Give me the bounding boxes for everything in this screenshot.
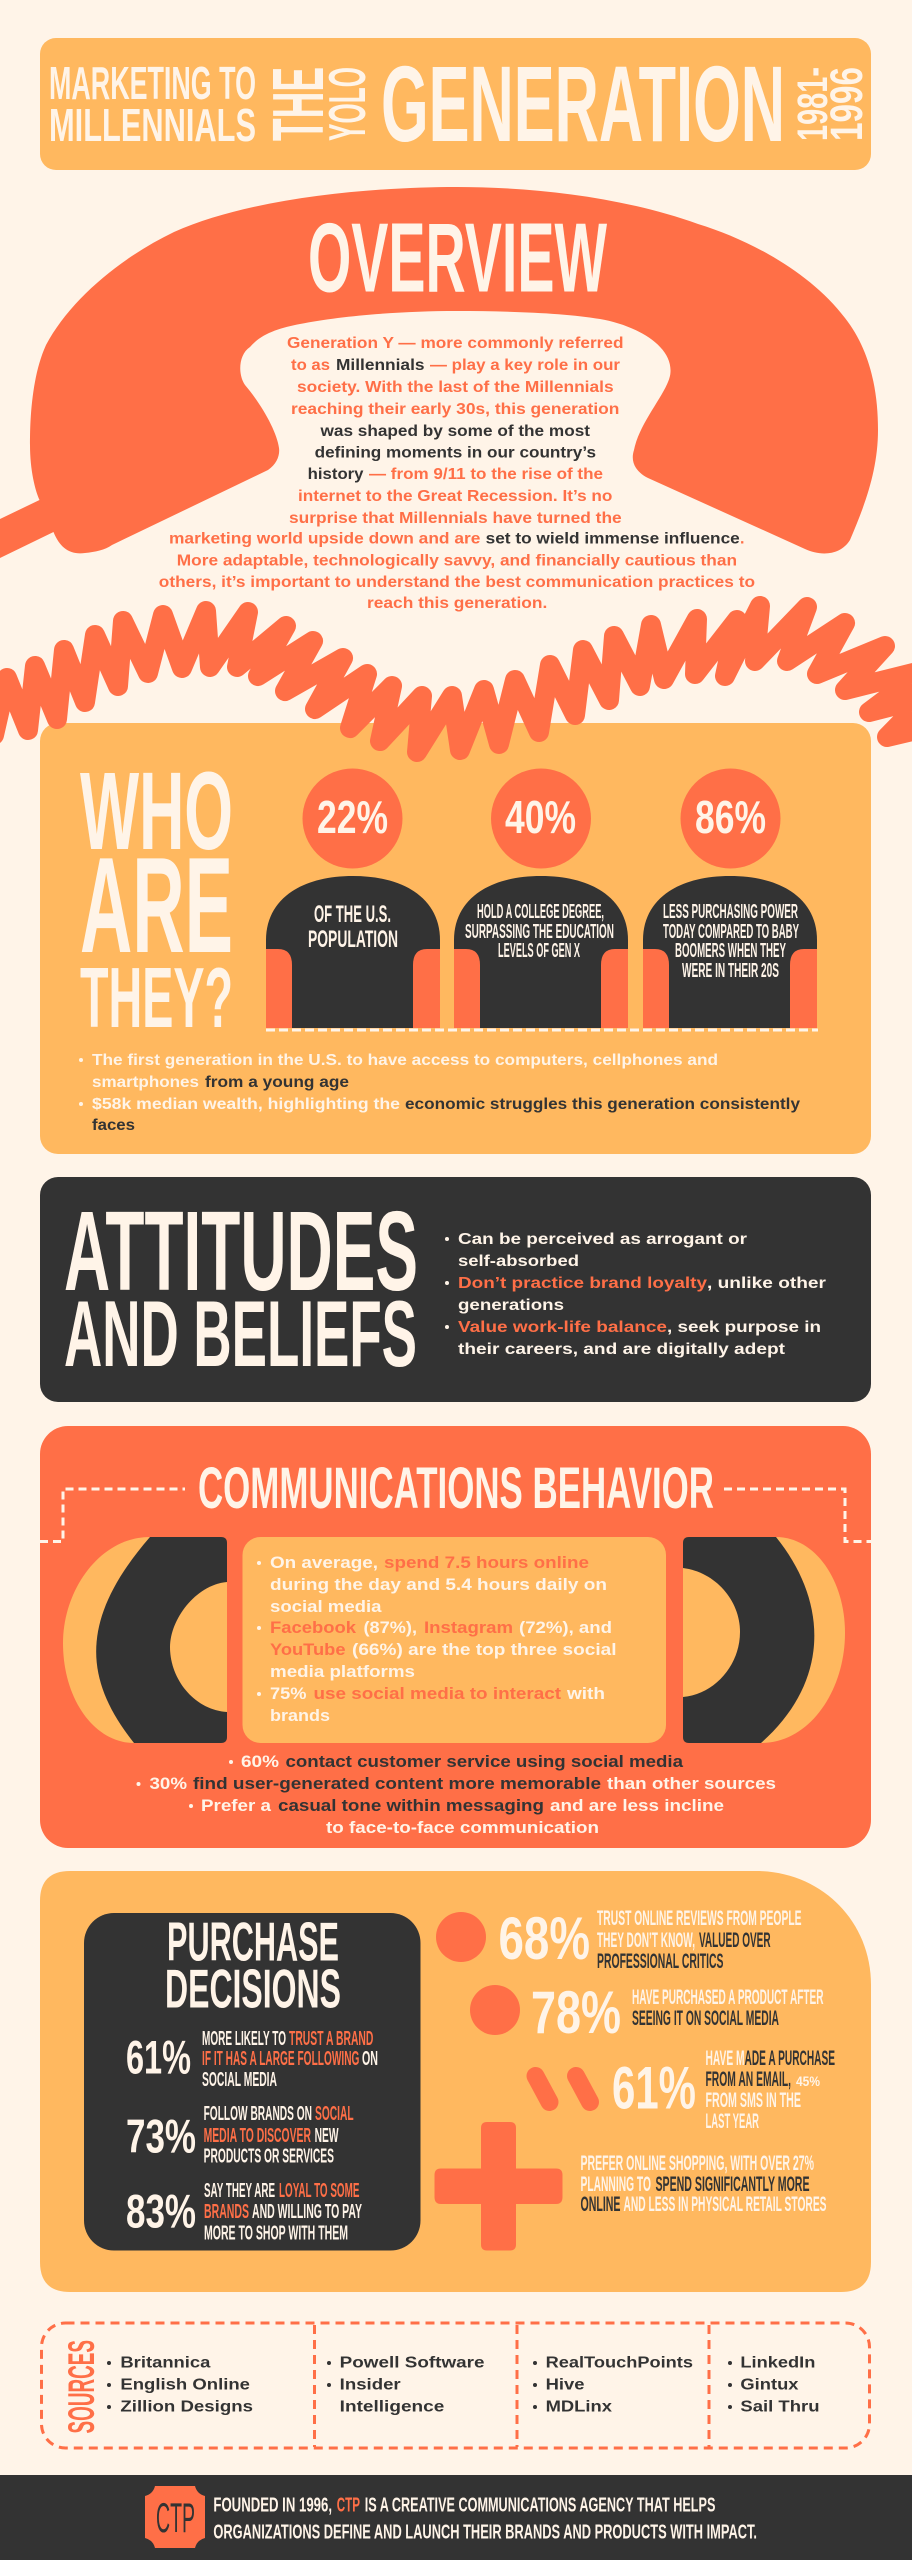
heading: purchase decisions: PURCHASE	[167, 1910, 339, 1972]
overview paragraph	[159, 335, 755, 612]
footer text: IS A CREATIVE COMMUNICATIONS AGENCY THAT HELPS	[365, 2494, 715, 2516]
overview paragraph: — from 9/11 to the rise of the	[369, 466, 603, 483]
title: years: 1996	[821, 67, 872, 141]
stat: 68 percent trust reviews: PROFESSIONAL CRITICS	[597, 1950, 724, 1973]
stat: 61 percent email: FROM AN EMAIL,	[706, 2068, 791, 2091]
overview paragraph: More adaptable, technologically savvy, and financially cautious than	[177, 552, 737, 570]
title: years	[789, 67, 872, 141]
overview paragraph: reaching their early 30s, this generation	[291, 401, 619, 418]
cassette label: online stats: YouTube	[270, 1641, 346, 1659]
sources column 4: LinkedIn	[740, 2354, 815, 2372]
stat: 61 percent trust: ON	[362, 2048, 378, 2070]
panel: sources	[42, 2323, 870, 2448]
heading: who are they: THEY?	[80, 951, 233, 1046]
communications bullet list: and are less incline	[550, 1797, 724, 1815]
cassette label: online stats: use social media to interact	[314, 1685, 562, 1703]
who are they bullet list	[79, 1052, 800, 1134]
dark card: purchase decisions stats	[84, 1910, 420, 2250]
panel: who are they	[40, 723, 871, 1154]
cassette label: online stats: media platforms	[270, 1663, 415, 1681]
heading: attitudes and beliefs	[64, 1188, 418, 1386]
sources column 2: Intelligence	[340, 2398, 444, 2416]
stat: 68 percent trust reviews: 68%	[498, 1905, 590, 1972]
figure: 86 percent: 86%	[695, 791, 766, 843]
title: the yolo: THE	[259, 67, 339, 141]
figure: 40 percent: SURPASSING THE EDUCATION	[465, 921, 614, 943]
panel: attitudes and beliefs	[40, 1177, 871, 1402]
communications bullet list: Prefer a	[201, 1797, 272, 1815]
footer	[0, 2475, 912, 2560]
coiled phone cord	[0, 606, 912, 752]
stat: 73 percent follow: SOCIAL	[315, 2103, 354, 2125]
figure: 86 percent: BOOMERS WHEN THEY	[675, 940, 786, 962]
figure: 86 percent: WERE IN THEIR 20S	[682, 960, 779, 982]
heading: sources: SOURCES	[61, 2340, 102, 2434]
title: marketing to millennials: MILLENNIALS	[49, 99, 256, 151]
stat: 68 percent trust reviews	[436, 1905, 802, 1973]
who are they bullet list: $58k median wealth, highlighting the	[92, 1096, 400, 1113]
overview paragraph: set to wield immense influence	[486, 530, 740, 548]
heading: attitudes and beliefs: AND BELIEFS	[64, 1281, 417, 1386]
figure: 22 percent: OF THE U.S.	[314, 901, 391, 928]
footer text: FOUNDED IN 1996,	[213, 2494, 332, 2516]
stat: 83 percent loyal: SAY THEY ARE	[204, 2180, 275, 2202]
cassette label: online stats: Facebook	[270, 1619, 357, 1637]
sources column 2: Insider	[340, 2376, 401, 2394]
communications bullet list: casual tone within messaging	[278, 1797, 544, 1815]
attitudes bullet list: Value work-life balance	[458, 1319, 667, 1336]
cassette label: online stats: Instagram	[424, 1619, 513, 1637]
overview paragraph: history	[308, 466, 364, 483]
stat: 83 percent loyal: MORE TO SHOP WITH THEM	[204, 2222, 348, 2244]
stat: 83 percent loyal	[126, 2180, 362, 2244]
communications bullet list: to face-to-face communication	[326, 1819, 599, 1837]
who are they bullet list: economic struggles this generation consistently	[405, 1096, 800, 1113]
cassette label: online stats	[242, 1537, 666, 1743]
panel: communications behavior	[40, 1426, 871, 1848]
attitudes bullet list: Can be perceived as arrogant or	[458, 1231, 747, 1248]
sources column 3: RealTouchPoints	[546, 2354, 693, 2372]
cassette label: online stats: (87%),	[364, 1619, 417, 1637]
stat: 61 percent email: FROM SMS IN THE	[706, 2089, 801, 2112]
sources column 3	[533, 2354, 693, 2416]
attitudes bullet list: their careers, and are digitally adept	[458, 1341, 786, 1358]
title: the yolo	[259, 67, 377, 141]
sources column 1: English Online	[120, 2376, 250, 2394]
stat: 73 percent follow: MEDIA TO DISCOVER	[204, 2125, 311, 2147]
overview paragraph: to as	[291, 357, 330, 374]
sources column 4: Gintux	[740, 2376, 799, 2394]
footer text: CTP	[337, 2494, 360, 2516]
overview paragraph: — play a key role in our	[430, 357, 620, 374]
cassette label: online stats: during the day and 5.4 hours daily on	[270, 1576, 607, 1594]
sources column 3: MDLinx	[546, 2398, 612, 2416]
heading: who are they: WHO	[80, 750, 233, 873]
overview paragraph: others, it’s important to understand the best communication practices to	[159, 574, 755, 591]
attitudes bullet list: self-absorbed	[458, 1253, 579, 1270]
sources column 1: Zillion Designs	[120, 2398, 253, 2416]
sources column 1: Britannica	[120, 2354, 211, 2372]
footer text	[213, 2494, 757, 2544]
communications bullet list: 60%	[241, 1753, 279, 1771]
telephone handset	[0, 187, 878, 558]
figure: 22 percent: POPULATION	[308, 926, 398, 953]
cassette label: online stats: brands	[270, 1707, 330, 1725]
sources column 4	[728, 2354, 820, 2416]
who are they bullet list: smartphones	[92, 1074, 199, 1091]
attitudes bullet list: , unlike other	[707, 1275, 826, 1292]
icon: cassette right reel	[683, 1537, 845, 1743]
icon: ctp badge	[145, 2486, 205, 2548]
sources column 4: Sail Thru	[740, 2398, 820, 2416]
overview heading: OVERVIEW	[308, 202, 607, 312]
sources column 3: Hive	[546, 2376, 585, 2394]
stat: 61 percent email: LAST YEAR	[706, 2110, 759, 2133]
sources column 1	[107, 2354, 253, 2416]
overview paragraph: Generation Y — more commonly referred	[287, 335, 624, 352]
heading: who are they	[80, 750, 233, 1046]
who are they bullet list: from a young age	[205, 1074, 349, 1091]
overview paragraph: .	[740, 530, 744, 548]
overview paragraph: was shaped by some of the most	[319, 423, 591, 440]
cassette label: online stats: spend 7.5 hours online	[384, 1554, 589, 1572]
overview paragraph: internet to the Great Recession. It’s no	[298, 488, 613, 505]
stat: 68 percent trust reviews: VALUED OVER	[699, 1929, 771, 1952]
stat: 78 percent purchased	[470, 1979, 824, 2046]
stat: 73 percent follow: PRODUCTS OR SERVICES	[204, 2146, 334, 2168]
heading: purchase decisions	[165, 1910, 341, 2020]
sources column 2: Powell Software	[340, 2354, 485, 2372]
overview paragraph: reach this generation.	[367, 595, 547, 612]
stat: 61 percent email	[536, 2047, 835, 2133]
cassette label: online stats: with	[566, 1685, 605, 1703]
figure: 22 percent: 22%	[317, 791, 388, 843]
stat: 83 percent loyal: AND WILLING TO PAY	[252, 2201, 362, 2223]
figure: 40 percent: HOLD A COLLEGE DEGREE,	[477, 901, 604, 923]
title banner	[40, 38, 872, 170]
attitudes bullet list: generations	[458, 1297, 564, 1314]
stat: 73 percent follow: FOLLOW BRANDS ON	[204, 2103, 312, 2125]
overview paragraph: Millennials	[336, 357, 425, 374]
figure: 22 percent	[266, 768, 440, 1028]
stat: 61 percent trust: 61%	[126, 2030, 191, 2084]
heading: purchase decisions: DECISIONS	[165, 1958, 341, 2020]
communications bullet list: 30%	[150, 1775, 187, 1793]
cassette label: online stats: 75%	[270, 1685, 307, 1703]
icon: ctp badge: CTP	[156, 2494, 195, 2541]
who are they bullet list: The first generation in the U.S. to have access to computers, cellphones and	[92, 1052, 718, 1069]
stat: 61 percent email: 45%	[796, 2073, 820, 2089]
overview paragraph: society. With the last of the Millennials	[297, 379, 614, 396]
communications bullet list: find user-generated content more memorable	[193, 1775, 601, 1793]
stat: 83 percent loyal: 83%	[126, 2184, 196, 2238]
overview paragraph: defining moments in our country’s	[315, 444, 596, 462]
who are they bullet list: faces	[92, 1117, 135, 1134]
communications bullet list: contact customer service using social media	[286, 1753, 684, 1771]
heading: who are they: ARE	[80, 829, 233, 981]
attitudes bullet list	[445, 1231, 826, 1358]
attitudes bullet list: Don’t practice brand loyalty	[458, 1275, 707, 1292]
stat: 61 percent trust: MORE LIKELY TO	[202, 2028, 286, 2050]
title: marketing to millennials	[49, 57, 256, 151]
stat: 61 percent trust: TRUST A BRAND	[289, 2028, 373, 2050]
stat: 83 percent loyal: BRANDS	[204, 2201, 249, 2223]
stat: 61 percent email: HAVE M	[706, 2047, 744, 2070]
communications bullet list	[136, 1753, 776, 1837]
stat: 61 percent email: 61%	[612, 2054, 696, 2122]
attitudes bullet list: , seek purpose in	[667, 1319, 821, 1336]
stat: 61 percent trust	[126, 2028, 378, 2091]
title: years: 1981-	[789, 67, 837, 141]
overview paragraph: surprise that Millennials have turned the	[289, 510, 622, 527]
communications bullet list: than other sources	[607, 1775, 776, 1793]
stat: 73 percent follow: NEW	[315, 2125, 339, 2147]
stat: 61 percent trust: SOCIAL MEDIA	[202, 2069, 277, 2091]
cassette label: online stats: social media	[270, 1598, 382, 1616]
stat: 78 percent purchased: 78%	[531, 1979, 621, 2046]
stat: prefer online shopping: ONLINE	[580, 2193, 620, 2216]
figure: 86 percent	[643, 768, 817, 1028]
overview paragraph: marketing world upside down and are	[169, 530, 481, 548]
cassette label: online stats: (66%) are the top three social	[352, 1641, 616, 1659]
stat: prefer online shopping	[434, 2122, 826, 2250]
cassette label: online stats: (72%), and	[519, 1619, 612, 1637]
figure: 40 percent: LEVELS OF GEN X	[498, 940, 580, 962]
title: marketing to millennials: MARKETING TO	[49, 57, 256, 109]
figure: 40 percent	[454, 768, 628, 1028]
stat: 83 percent loyal: LOYAL TO SOME	[279, 2180, 359, 2202]
icon: cassette left reel	[63, 1537, 227, 1743]
heading: attitudes and beliefs: ATTITUDES	[64, 1188, 418, 1314]
stat: 61 percent trust: IF IT HAS A LARGE FOLLOWING	[202, 2048, 359, 2070]
panel: purchase decisions	[40, 1871, 871, 2292]
figure: 40 percent: 40%	[505, 791, 576, 843]
stat: 73 percent follow	[126, 2103, 354, 2168]
sources column 2	[327, 2354, 485, 2416]
stat: 68 percent trust reviews: THEY DON’T KNOW,	[597, 1929, 695, 1952]
stat: prefer online shopping: PLANNING TO	[580, 2173, 651, 2196]
stat: 73 percent follow: 73%	[126, 2110, 196, 2162]
cassette label: online stats: On average,	[270, 1554, 378, 1572]
